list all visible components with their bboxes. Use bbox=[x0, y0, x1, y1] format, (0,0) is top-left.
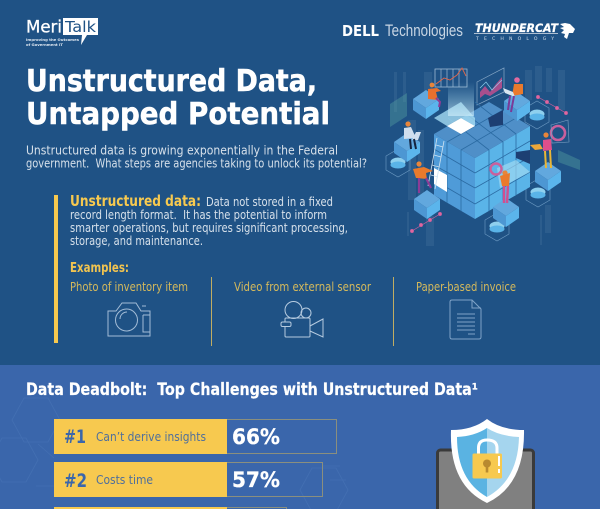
bar: #1 can't derive insights 66% bbox=[54, 419, 336, 454]
example: photo of inventory item bbox=[70, 280, 188, 336]
bar: third challenge, cropped bbox=[54, 507, 286, 509]
logo: MeriTalk: Talk bbox=[64, 18, 96, 36]
logo: MeriTalk: Meri bbox=[26, 18, 62, 36]
title: Untapped Potential bbox=[26, 97, 330, 132]
definition text: storage, and maintenance. bbox=[70, 234, 203, 248]
example: video from external sensor: Video from external sensor bbox=[234, 280, 372, 294]
example: video from external sensor bbox=[234, 280, 372, 337]
bar: #2 costs time 57%: Costs time bbox=[96, 472, 153, 487]
definition text bbox=[70, 192, 348, 248]
divider bbox=[211, 277, 212, 346]
logo: Dell Technologies: Technologies bbox=[385, 22, 463, 40]
bar: #2 costs time 57% bbox=[54, 462, 322, 497]
notch and glow on the cube bbox=[434, 150, 530, 192]
shield bbox=[451, 419, 524, 503]
logo: Thundercat Technology: TECHNOLOGY bbox=[475, 36, 554, 42]
divider bbox=[393, 277, 394, 346]
examples heading: Examples: bbox=[70, 261, 129, 276]
intro text: government. What steps are agencies taking to unlock its potential? bbox=[26, 156, 367, 170]
icon: laptop with security shield bbox=[438, 419, 534, 509]
area chart panel bbox=[477, 68, 504, 105]
logo: Dell Technologies bbox=[342, 22, 463, 40]
logo: Thundercat Technology bbox=[474, 21, 575, 42]
intro text bbox=[26, 142, 367, 170]
background circuit pattern bbox=[0, 398, 348, 509]
pedestal blocks bbox=[413, 90, 439, 119]
cube top face bbox=[434, 82, 530, 158]
worker centre with magnifier bbox=[490, 164, 510, 203]
line chart panel bbox=[435, 68, 467, 87]
padlock bbox=[472, 440, 502, 478]
gears bbox=[525, 101, 549, 129]
title bbox=[26, 64, 330, 132]
logo: Dell Technologies: DELL bbox=[342, 22, 379, 40]
bar: #1 can't derive insights 66%: Can’t derive insights bbox=[96, 429, 206, 444]
cube right face bbox=[475, 126, 530, 219]
bar: #1 can't derive insights 66%: 66% bbox=[232, 425, 280, 450]
illustration: isometric data cube with workers bbox=[386, 66, 580, 246]
example: paper-based invoice bbox=[416, 280, 516, 339]
pink node lines bbox=[410, 95, 568, 233]
worker right with magnifier bbox=[530, 120, 569, 168]
panel: challenges background bbox=[0, 365, 600, 509]
bar: #2 costs time 57%: #2 bbox=[64, 471, 87, 492]
logo: Thundercat Technology: THUNDERCAT bbox=[475, 21, 559, 35]
bar: #2 costs time 57%: 57% bbox=[232, 468, 280, 493]
intro text: Unstructured data is growing exponentially in the Federal bbox=[26, 142, 338, 158]
laptop screen bbox=[438, 450, 534, 509]
worker top right with laptop bbox=[503, 77, 523, 112]
bar: #1 can't derive insights 66%: #1 bbox=[64, 427, 86, 448]
section heading: Data Deadbolt: Top Challenges with Unstructured Data¹ bbox=[26, 380, 478, 399]
definition text: smarter operations, but requires significant processing, bbox=[70, 221, 348, 235]
definition text: record length format. It has the potential to inform bbox=[70, 208, 327, 222]
panel: header background bbox=[0, 0, 600, 365]
ladder bbox=[428, 138, 444, 189]
logo: MeriTalk: of Government IT bbox=[26, 42, 63, 47]
example: paper-based invoice: Paper-based invoice bbox=[416, 280, 516, 294]
logo: MeriTalk bbox=[26, 18, 98, 47]
example: photo of inventory item: Photo of inventory item bbox=[70, 280, 188, 294]
title: Unstructured Data, bbox=[26, 64, 317, 99]
worker lower left bbox=[413, 161, 433, 193]
definition text: Unstructured data: bbox=[70, 192, 201, 210]
green code panels bbox=[390, 93, 580, 170]
data columns backdrop bbox=[394, 66, 565, 246]
accent bar bbox=[54, 195, 58, 343]
definition text: Data not stored in a fixed bbox=[206, 195, 333, 209]
worker top left bbox=[428, 83, 441, 107]
worker left with laptop bbox=[404, 121, 421, 149]
cube left face bbox=[434, 134, 475, 219]
logo: MeriTalk: Improving the Outcomes bbox=[26, 37, 80, 42]
